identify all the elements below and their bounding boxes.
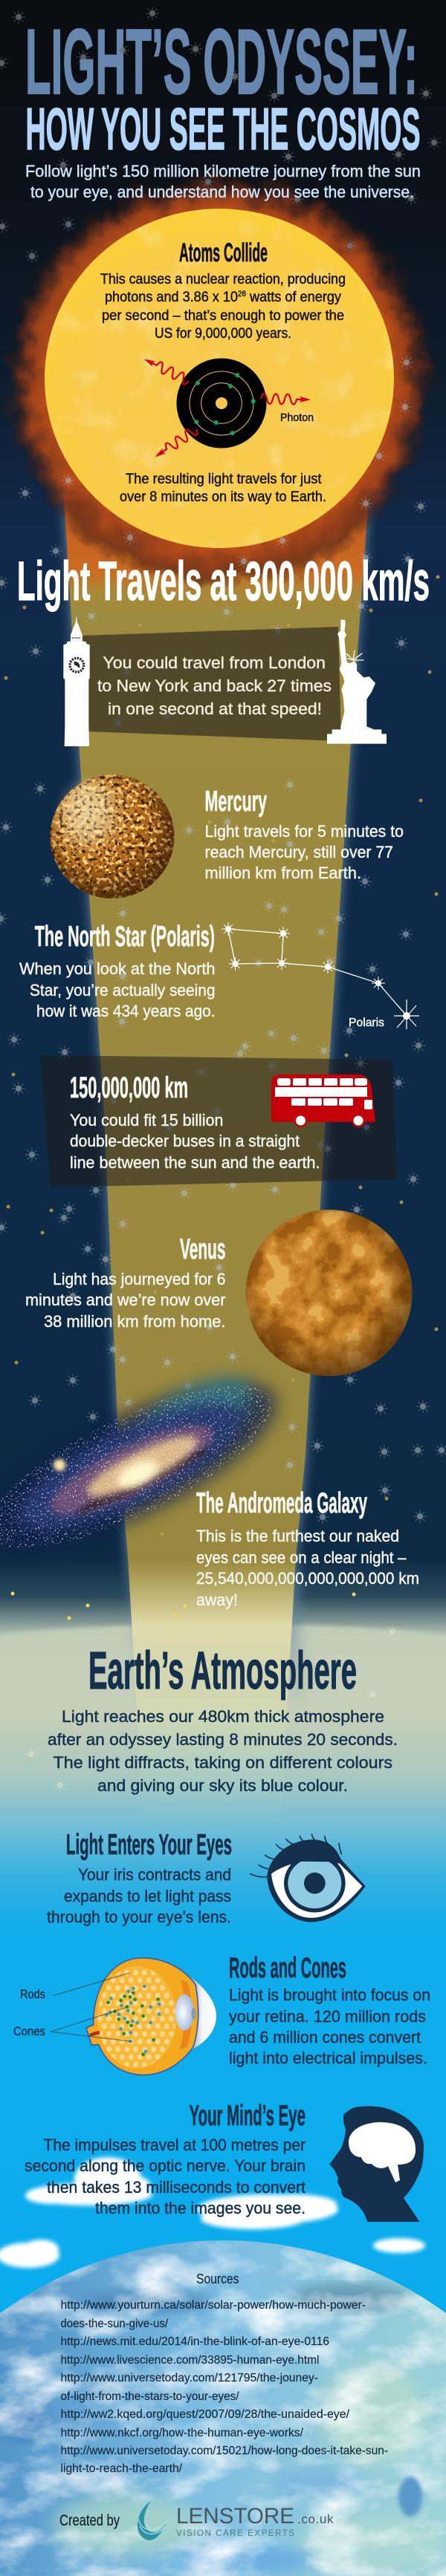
light enters your eyes text: Light Enters Your Eyes — [66, 1829, 232, 1861]
panel: london to new york — [83, 627, 341, 741]
atoms collide text — [100, 271, 346, 342]
your mind's eye text — [25, 2100, 306, 2217]
mercury text: million km from Earth. — [205, 864, 361, 882]
andromeda galaxy — [0, 1352, 295, 1581]
lenstore logo: VISION CARE EXPERTS — [176, 2529, 294, 2538]
photon label: Photon — [280, 411, 314, 424]
mercury text: Light travels for 5 minutes to — [205, 822, 404, 841]
atoms collide text: US for 9,000,000 years. — [155, 325, 291, 342]
rods and cones text — [229, 1952, 430, 2067]
icon: big ben — [63, 616, 90, 746]
atmosphere text: and giving our sky its blue colour. — [97, 1776, 348, 1795]
atoms collide text: This causes a nuclear reaction, producing — [100, 271, 346, 287]
sun corona flames — [2, 171, 436, 590]
sources list: http://news.mit.edu/2014/in-the-blink-of-an-eye-0116 — [61, 2335, 329, 2348]
resulting light text: The resulting light travels for just — [126, 471, 322, 487]
mercury text: Mercury — [205, 786, 267, 818]
lenstore logo — [138, 2501, 334, 2540]
planet: venus — [245, 1210, 412, 1376]
sources list: http://ww2.kqed.org/quest/2007/09/28/the-unaided-eye/ — [61, 2408, 350, 2421]
cones — [105, 1985, 161, 2053]
clouds above earth — [0, 2238, 425, 2268]
atoms collide text: watts of energy — [249, 289, 341, 305]
light enters your eyes text: Your iris contracts and — [78, 1865, 231, 1884]
panel: london to new york: in one second at that speed! — [108, 700, 322, 718]
venus text: Light has journeyed for 6 — [53, 1270, 226, 1288]
andromeda text — [196, 1487, 419, 1609]
atmosphere curved horizon — [0, 1624, 446, 2005]
sources list: http://www.universetoday.com/15021/how-long-does-it-take-sun- — [61, 2445, 388, 2457]
light enters your eyes text: expands to let light pass — [64, 1887, 231, 1905]
north star text: When you look at the North — [19, 959, 216, 978]
retina labels — [13, 1987, 45, 2038]
venus text: minutes and we’re now over — [25, 1291, 226, 1309]
north star text: Star, you’re actually seeing — [30, 981, 216, 1000]
retina labels: Rods — [20, 1987, 45, 2001]
andromeda text: This is the furthest our naked — [196, 1527, 399, 1545]
light enters your eyes text — [47, 1829, 232, 1926]
rods and cones text: your retina. 120 million rods — [229, 2007, 426, 2026]
sources list: http://www.nkcf.org/how-the-human-eye-works/ — [61, 2427, 304, 2439]
andromeda text: 25,540,000,000,000,000,000 km — [196, 1569, 419, 1588]
panel: double-decker buses: line between the sun and the earth. — [70, 1153, 320, 1172]
subtitle: to your eye, and understand how you see the universe. — [30, 183, 414, 201]
rods — [97, 1966, 176, 2068]
leader lines — [51, 1973, 131, 2041]
retina diagram — [51, 1958, 216, 2075]
cornea — [181, 1970, 216, 2055]
atoms collide text: photons and 3.86 x 10 — [105, 289, 238, 305]
constellation: big dipper to polaris — [222, 922, 419, 1029]
eyeball — [86, 1958, 198, 2075]
your mind's eye text: The impulses travel at 100 metres per — [43, 2136, 306, 2154]
icon: eye — [251, 1834, 366, 1922]
panel: double-decker buses: 150,000,000 km — [70, 1072, 188, 1104]
atmosphere text: Light reaches our 480km thick atmosphere — [62, 1707, 384, 1726]
light beam glow — [59, 453, 375, 1708]
rods and cones text: light into electrical impulses. — [229, 2049, 427, 2067]
panel: double-decker buses: You could fit 15 billion — [70, 1111, 223, 1129]
clouds behind mind's eye text — [25, 2157, 338, 2229]
atmosphere text: The light diffracts, taking on different colours — [54, 1753, 392, 1772]
sources list: light-to-reach-the-earth/ — [61, 2462, 183, 2475]
created by: Created by — [59, 2512, 120, 2529]
subtitle: Follow light’s 150 million kilometre journey from the sun — [25, 162, 421, 180]
lenstore logo: .co.uk — [297, 2512, 334, 2526]
sources list: http://www.universetoday.com/121795/the-jouney- — [61, 2372, 318, 2384]
title — [25, 11, 421, 162]
mercury text: reach Mercury, still over 77 — [205, 843, 393, 861]
panel: london to new york: You could travel from London — [103, 653, 326, 672]
panel: double-decker buses: double-decker buses in a straight — [70, 1132, 300, 1150]
sources list: does-the-sun-give-us/ — [61, 2318, 169, 2330]
panel: double-decker buses — [40, 1055, 397, 1187]
atoms collide text: per second – that’s enough to power the — [102, 307, 344, 324]
star field — [0, 7, 446, 1792]
sources heading: Sources — [196, 2272, 239, 2286]
resulting light text: over 8 minutes on its way to Earth. — [120, 489, 326, 505]
atmosphere text: after an odyssey lasting 8 minutes 20 seconds. — [48, 1730, 398, 1749]
icon: statue of liberty — [327, 619, 387, 744]
sources list: http://www.yourturn.ca/solar/solar-power/how-much-power- — [61, 2299, 366, 2312]
venus text: Venus — [180, 1233, 226, 1265]
north star text: The North Star (Polaris) — [35, 921, 215, 953]
atmosphere text — [48, 1707, 398, 1795]
icon: head with brain — [329, 2106, 424, 2222]
atoms collide text: 26 — [238, 290, 246, 299]
rods and cones text: and 6 million cones convert — [229, 2028, 421, 2047]
ciliary muscle — [180, 1980, 192, 2050]
retina labels: Cones — [13, 2024, 45, 2038]
your mind's eye text: then takes 13 milliseconds to convert — [47, 2178, 306, 2197]
optic nerve — [90, 2032, 100, 2035]
photon arrows — [142, 355, 311, 461]
lens — [175, 1995, 194, 2030]
resulting light text — [120, 471, 326, 505]
sources list: of-light-from-the-stars-to-your-eyes/ — [61, 2390, 239, 2403]
atom diagram — [142, 355, 311, 461]
sun disc — [45, 209, 394, 548]
planet: mercury — [51, 775, 174, 899]
north star text: how it was 434 years ago. — [36, 1002, 216, 1020]
your mind's eye text: second along the optic nerve. Your brain — [25, 2156, 306, 2175]
venus text — [25, 1233, 226, 1331]
andromeda text: eyes can see on a clear night – — [196, 1548, 407, 1567]
rods and cones text: Light is brought into focus on — [229, 1986, 430, 2004]
lenstore logo: LENSTORE — [176, 2504, 294, 2528]
subtitle — [25, 162, 421, 201]
andromeda text: away! — [196, 1591, 238, 1609]
icon: red bus — [271, 1075, 375, 1127]
atoms collide heading: Atoms Collide — [179, 238, 268, 267]
north star text — [19, 921, 216, 1020]
polaris label: Polaris — [349, 1017, 384, 1029]
venus text: 38 million km from home. — [44, 1312, 226, 1331]
sources list: http://www.livescience.com/33895-human-eye.html — [61, 2354, 320, 2367]
your mind's eye text: them into the images you see. — [95, 2199, 306, 2217]
sources list — [61, 2299, 388, 2475]
light beam from sun — [59, 446, 375, 1856]
light enters your eyes text: through to your eye’s lens. — [47, 1908, 231, 1926]
your mind's eye text: Your Mind’s Eye — [189, 2100, 306, 2132]
panel: london to new york: to New York and back 27 times — [97, 676, 332, 695]
planet earth — [0, 2240, 446, 2576]
mercury text — [205, 786, 404, 882]
